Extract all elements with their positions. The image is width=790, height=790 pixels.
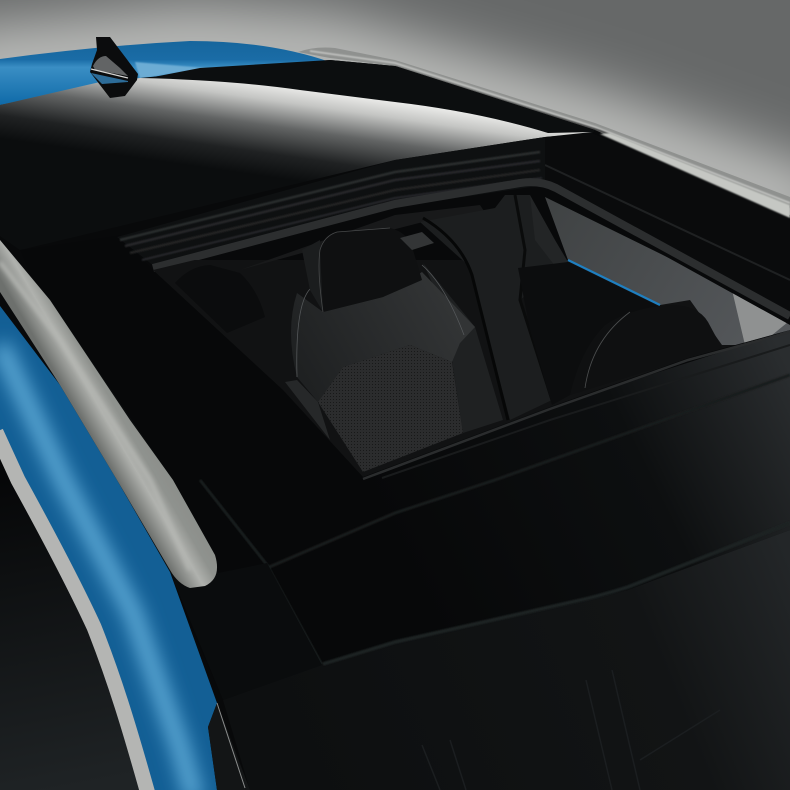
panel seam lines: [200, 375, 790, 665]
blue rear roof section: [0, 41, 330, 105]
front black glass panel: [20, 235, 790, 700]
opening trim: [153, 182, 790, 316]
right roof rail: [298, 48, 790, 217]
black roof band behind highlight: [138, 60, 595, 135]
cabin interior seen through opening: [150, 195, 790, 500]
silver window trim: [0, 432, 148, 790]
lip second edge: [382, 345, 790, 478]
wedge highlight: [217, 703, 245, 788]
perforated seat centre: [318, 345, 463, 472]
side window: [545, 197, 790, 345]
wave seam: [323, 523, 790, 664]
rear parcel shelf: [269, 205, 483, 260]
frame groove: [545, 165, 790, 280]
windscreen surface: [223, 530, 790, 790]
frame highlight stripe: [600, 133, 790, 218]
rear headrest: [302, 228, 422, 312]
rear seat side bolster: [423, 263, 503, 433]
black A pillar wedge: [208, 703, 250, 790]
front lip of opening: [363, 332, 790, 479]
blue belt line: [568, 260, 660, 305]
glossy black roof panel: [0, 78, 592, 250]
seat buckle: [400, 232, 434, 250]
cabin base: [154, 260, 734, 476]
front seat headrest: [584, 312, 716, 388]
cabin seen through windscreen: [422, 670, 720, 790]
left rear headrest: [175, 265, 265, 333]
interior trim and B pillar: [420, 195, 568, 420]
blue pillar: [0, 306, 217, 790]
shark fin antenna: [90, 37, 138, 98]
seat stitching: [297, 265, 464, 377]
side window dark glass: [0, 440, 148, 790]
door panel: [518, 262, 568, 297]
right side black frame: [540, 133, 790, 320]
seat belt channel: [423, 218, 508, 420]
black strip beside rail: [50, 300, 322, 700]
rear seat backrest: [291, 272, 475, 402]
retracted sunroof slats: [117, 137, 545, 267]
bright exterior through window: [732, 293, 786, 342]
silver roof rail: [0, 240, 217, 588]
lower seat edge: [285, 380, 330, 440]
